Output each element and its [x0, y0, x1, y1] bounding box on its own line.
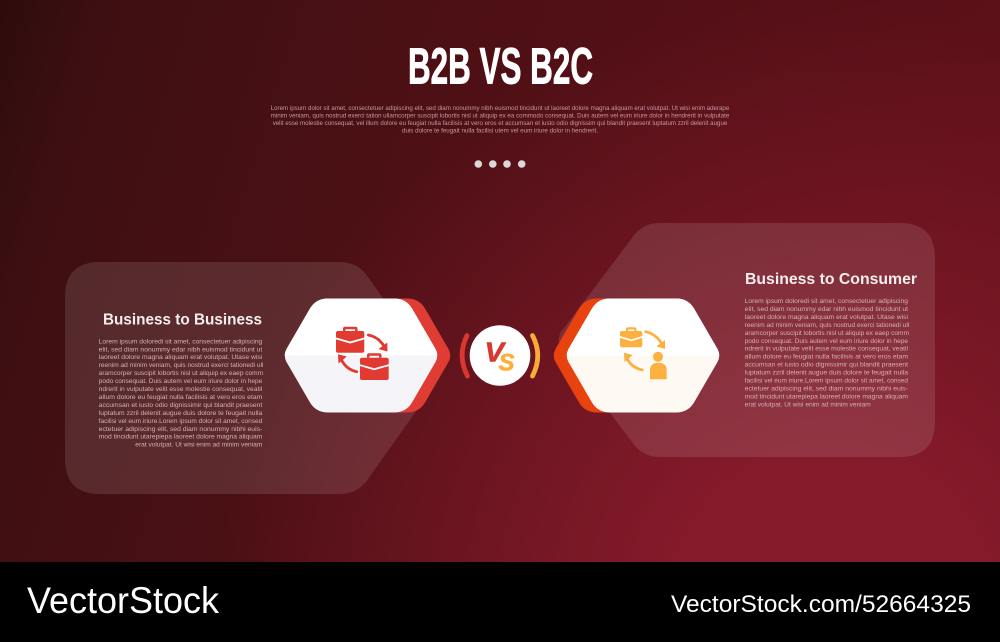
- text block: business to consumer: accumsan et iusto odio dignissimir qui blandit praesent: [745, 362, 908, 369]
- hexagon: business to consumer: [554, 298, 719, 412]
- heading: business to business: Business to Business: [103, 312, 262, 328]
- text block: business to business: luptatum zzril delenit augue duis dolore te feugait nulla: [99, 410, 263, 417]
- text block: business to consumer: erat volutpat. Ut wisi enim ad minim veniam: [745, 401, 871, 408]
- text block: business to business: elit, sed diam nonummy edar nibh euismod tincidunt ut: [99, 346, 263, 353]
- footer band: [0, 562, 1000, 642]
- text block: business to business: podo consequat. Duis autem vel eum iriure dolor in hepe: [99, 378, 263, 385]
- intro paragraph: [271, 105, 730, 134]
- text block: business to consumer: mod tincidunt utarepiepa laoreet dolore magna aliquam: [745, 393, 908, 400]
- vs letter v: V: [484, 337, 507, 368]
- text block: business to consumer: laoreet dolore magna aliquam erat volutpat. Utase wisi: [745, 314, 908, 321]
- text block: business to business: Lorem ipsum doloredi sit amet, consectetuer adipiscing: [99, 338, 263, 345]
- text block: business to consumer: ectetuer adipiscing elit, sed diam nonummy nibhi euis-: [745, 385, 908, 392]
- text block: business to business: aramcorper suscipit lobortis nisl ut aliquip ex eaep comm: [99, 370, 263, 377]
- text block: business to consumer: facilisi vel eum iriure.Lorem ipsum dolor sit amet, consed: [745, 378, 908, 384]
- intro paragraph: duis dolore te feugait nulla facilisi utem vel eum iriure dolor in hendrerit.: [402, 128, 598, 134]
- vs badge: [462, 325, 538, 386]
- pagination dots: [474, 160, 526, 168]
- text block: business to business: facilisi vel eum iriure.Lorem ipsum dolor sit amet, consed: [99, 418, 263, 425]
- text block: business to consumer: luptatum zzril delenit augue duis dolore te feugait nulla: [745, 370, 908, 377]
- text block: business to consumer: Lorem ipsum doloredi sit amet, consectetuer adipiscing: [745, 298, 908, 305]
- text block: business to business: laoreet dolore magna aliquam erat volutpat. Utase wisi: [99, 354, 262, 361]
- heading: business to consumer: Business to Consumer: [745, 271, 917, 288]
- arc: left red: [462, 336, 468, 376]
- hexagon: business to business: [285, 298, 450, 412]
- text block: business to business: reenim ad minim veniam, quis nostrud exerci tationedi ull: [99, 362, 264, 369]
- title: B2B VS B2C: [408, 38, 593, 95]
- arc: right orange: [532, 336, 538, 376]
- text block: business to consumer: reenim ad minim veniam, quis nostrud exerci tationedi ull: [745, 322, 909, 329]
- text block: business to business: ectetuer adipiscing elit, sed diam nonummy nibhi euis-: [99, 426, 262, 433]
- vs letter s: S: [498, 350, 515, 376]
- panel: business to business: [65, 262, 436, 494]
- text block: business to consumer: aramcorper suscipit lobortis nisl ut aliquip ex eaep comm: [745, 330, 909, 337]
- icon: business to person: [620, 327, 667, 379]
- text block: business to business: erat volutpat. Ut wisi enim ad minim veniam: [135, 442, 262, 449]
- text block: business to consumer: ndrerit in vulputate velit esse molestie consequat, veatil: [745, 346, 908, 353]
- icon: briefcase exchange: [336, 327, 389, 380]
- vs circle: [470, 325, 530, 386]
- text block: business to business: ndrerit in vulputate velit esse molestie consequat, veatil: [99, 386, 262, 393]
- intro paragraph: Lorem ipsum dolor sit amet, consectetuer adipiscing elit, sed diam nonummy nibh euismod tincidunt ut laoreet dolore magna aliquam erat volutpat. Ut wisi enim aderape: [271, 105, 730, 112]
- footer logo: VectorStock: [27, 580, 219, 621]
- intro paragraph: minim veniam, quis nostrud exerci tation ullamcorper suscipit lobortis nisl ut aliquip ex ea commodo consequat. Duis autem vel eum iriure dolor in hendrerit in vulputate: [271, 112, 730, 120]
- text block: business to business: [99, 338, 264, 449]
- footer url: VectorStock.com/52664325: [671, 591, 971, 618]
- text block: business to consumer: elit, sed diam nonummy edar nibh euismod tincidunt ut: [745, 306, 908, 313]
- text block: business to business: accumsan et iusto odio dignissimir qui blandit praesent: [99, 402, 263, 409]
- intro paragraph: velit esse molestie consequat, vel illum dolore eu feugiat nulla facilisis at vero eros et accumsan et iusto odio dignissim qui blandit praesent luptatum zzril delenit augue: [273, 120, 728, 127]
- text block: business to consumer: [745, 298, 909, 408]
- text block: business to consumer: podo consequat. Duis autem vel eum iriure dolor in hepe: [745, 338, 908, 345]
- text block: business to consumer: allum dolore eu feugiat nulla facilisis at vero eros etam: [745, 354, 908, 361]
- panel: business to consumer: [558, 223, 935, 457]
- text block: business to business: mod tincidunt utarepiepa laoreet dolore magna aliquam: [99, 434, 262, 441]
- text block: business to business: allum dolore eu feugiat nulla facilisis at vero eros etam: [99, 394, 262, 401]
